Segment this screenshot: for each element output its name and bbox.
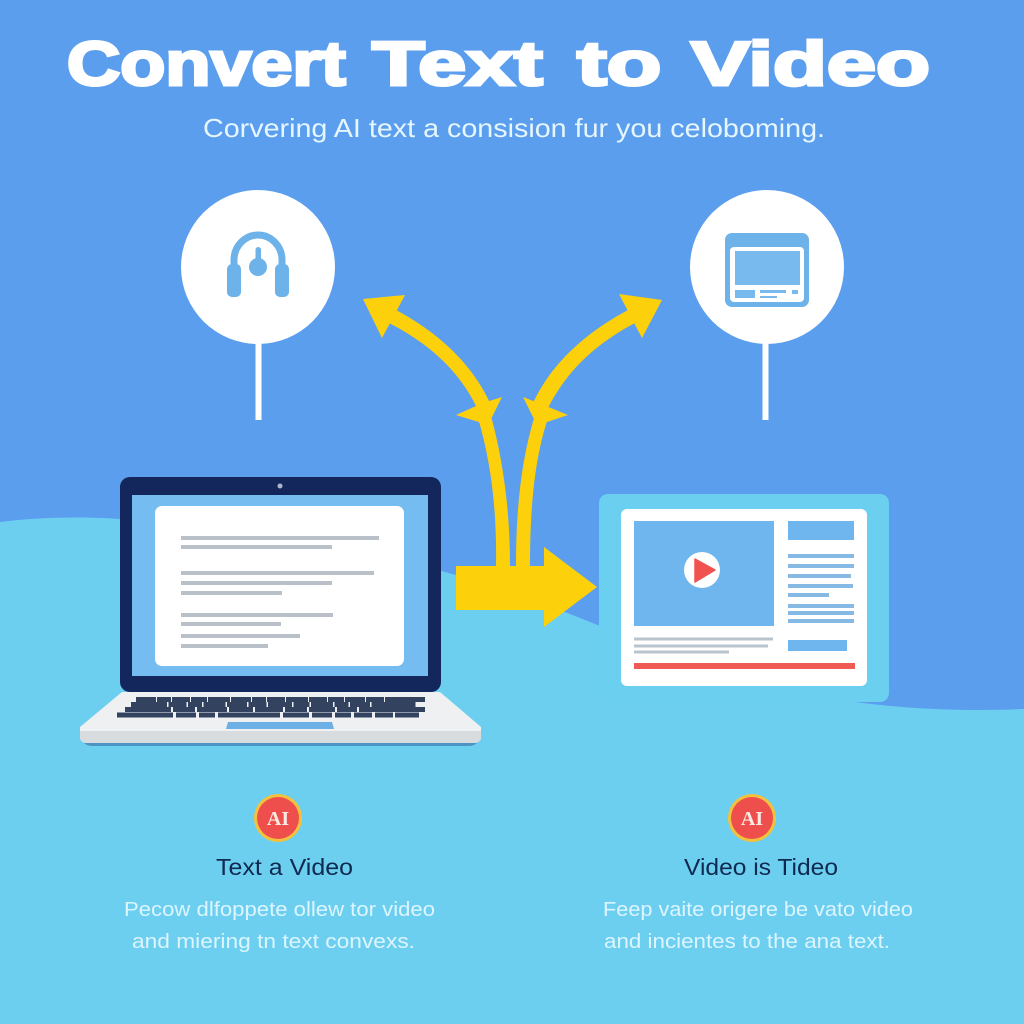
caption lines — [634, 638, 773, 654]
progress bar — [634, 663, 855, 669]
title: Video — [691, 30, 930, 99]
screen bezel — [120, 477, 441, 692]
background: light blue wave — [0, 518, 1024, 1024]
touchpad — [226, 722, 334, 729]
title: Text — [372, 29, 543, 98]
right pin: screen icon — [690, 190, 844, 420]
subtitle: Corvering AI text a consision fur you celoboming. — [203, 113, 825, 143]
left pin: headphones icon — [181, 190, 335, 420]
arrow: main horizontal arrow — [456, 547, 597, 627]
caption text: Feep vaite origere be vato video — [603, 899, 913, 921]
caption heading: Text a Video — [216, 854, 353, 880]
caption text — [124, 899, 435, 953]
badge: AI — [728, 794, 776, 842]
badge: AI: AI — [741, 808, 763, 830]
keyboard — [117, 700, 443, 715]
webcam — [278, 484, 282, 488]
document page — [155, 506, 404, 666]
arrow: yellow branching arrows — [363, 294, 662, 627]
laptop base — [80, 692, 481, 743]
caption heading: Video is Tideo — [684, 854, 838, 880]
caption text: Pecow dlfoppete ollew tor video — [124, 899, 435, 921]
screen — [132, 495, 428, 676]
title: to — [577, 29, 661, 99]
play button — [684, 552, 720, 588]
video area — [634, 521, 774, 626]
caption text: and incientes to the ana text. — [604, 931, 890, 953]
player window — [621, 509, 867, 686]
icon: video screen — [725, 233, 809, 307]
badge: AI — [254, 794, 302, 842]
arrow: left branch — [363, 295, 510, 566]
sidebar header — [788, 521, 854, 540]
video player panel — [599, 494, 889, 702]
left caption block — [124, 794, 435, 953]
caption text: and miering tn text convexs. — [132, 931, 415, 953]
sidebar lines — [788, 554, 854, 623]
document text lines — [181, 536, 379, 648]
arrow: right branch — [516, 294, 662, 566]
action button — [788, 640, 847, 651]
icon: headphones — [227, 235, 289, 297]
title: Convert — [67, 30, 346, 99]
right caption block — [603, 794, 913, 953]
laptop — [80, 477, 481, 746]
title — [67, 29, 930, 99]
caption text — [603, 899, 913, 953]
badge: AI: AI — [267, 808, 289, 830]
